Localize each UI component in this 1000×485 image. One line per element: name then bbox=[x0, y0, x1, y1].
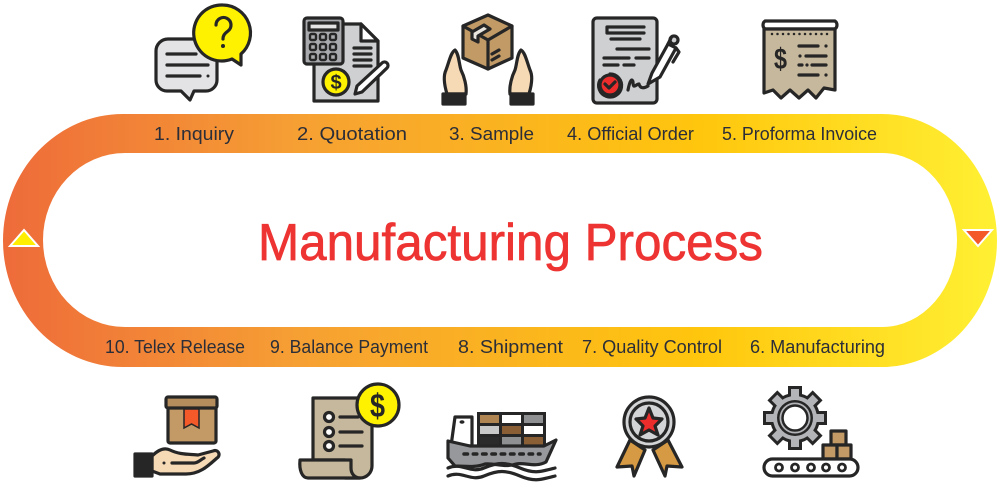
icon: telex release box on hand bbox=[135, 397, 219, 476]
label 2: 2. Quotation bbox=[297, 124, 407, 144]
icon: quality control medal bbox=[617, 397, 682, 476]
step labels, top row bbox=[154, 124, 877, 144]
process loop track bbox=[3, 114, 997, 367]
icon: inquiry speech bubbles bbox=[156, 5, 250, 100]
icon: official order signed document bbox=[593, 18, 679, 103]
label 7: 7. Quality Control bbox=[582, 337, 722, 357]
icon: proforma invoice receipt: $ bbox=[774, 43, 787, 76]
label 1: 1. Inquiry bbox=[154, 124, 234, 144]
label 9: 9. Balance Payment bbox=[270, 337, 428, 357]
icon: sample box held by hands bbox=[443, 15, 533, 104]
label 10: 10. Telex Release bbox=[105, 337, 245, 357]
label 3: 3. Sample bbox=[449, 124, 534, 144]
icon: shipment container ship bbox=[448, 412, 556, 480]
icon: quotation calculator and document: $ bbox=[330, 72, 342, 94]
label 8: 8. Shipment bbox=[458, 337, 563, 357]
icon: proforma invoice receipt bbox=[763, 21, 837, 98]
icon: quotation calculator and document bbox=[304, 18, 388, 101]
label 6: 6. Manufacturing bbox=[750, 337, 885, 357]
arrow: down, right side bbox=[964, 230, 992, 246]
label 4: 4. Official Order bbox=[567, 124, 694, 144]
label 5: 5. Proforma Invoice bbox=[722, 124, 877, 144]
arrow: up, left side bbox=[10, 230, 38, 246]
icon: balance payment bill with coin bbox=[300, 384, 399, 478]
title: Manufacturing Process bbox=[258, 214, 763, 272]
icon: balance payment bill with coin: $ bbox=[370, 387, 385, 424]
icon: manufacturing gear and conveyor bbox=[763, 386, 858, 476]
step labels, bottom row bbox=[105, 337, 885, 357]
